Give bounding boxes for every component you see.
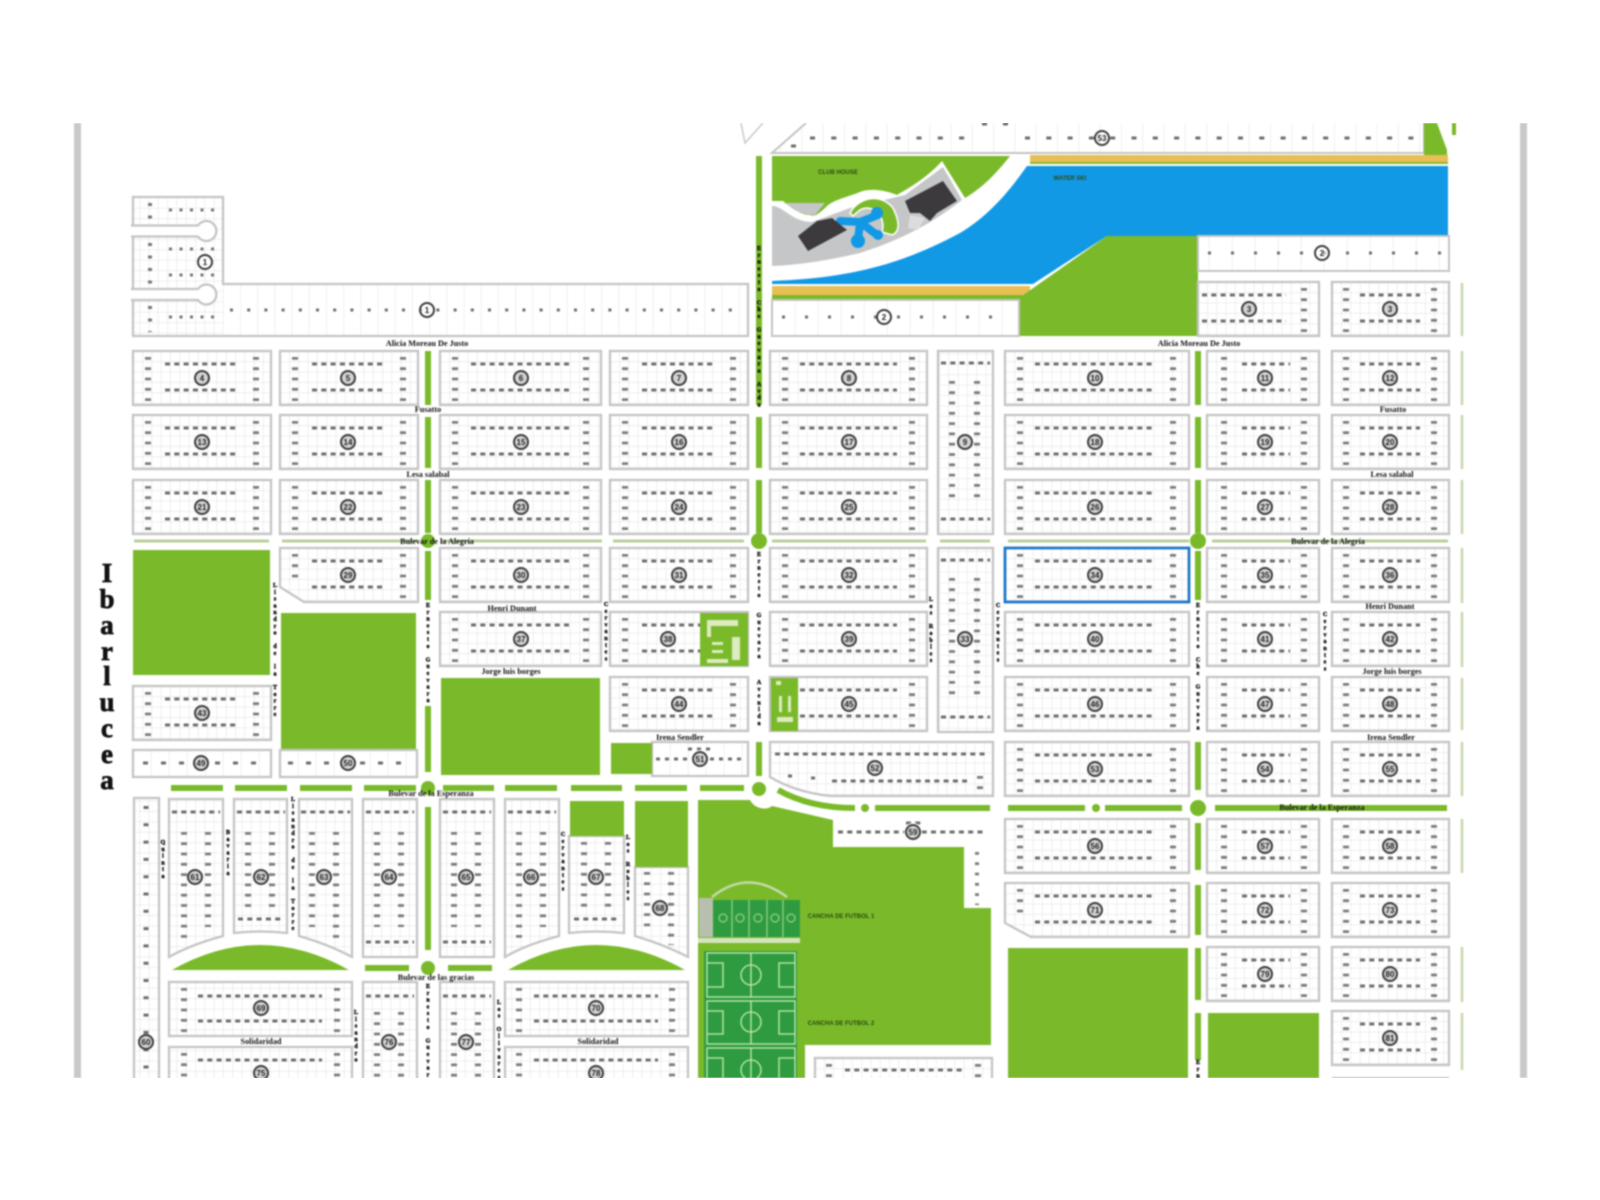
stadium with small pitches bbox=[698, 882, 800, 943]
row 4 blocks: 36 bbox=[1386, 571, 1395, 580]
bottom row blocks: 70 bbox=[592, 1004, 601, 1013]
row 3 blocks: 24 bbox=[675, 503, 684, 512]
vertical street names: Cervantes bbox=[995, 603, 1001, 664]
town name: Ibarlucea: b bbox=[99, 584, 115, 614]
row 2 blocks: 13 bbox=[198, 438, 207, 447]
block 3 left: 3 bbox=[1247, 305, 1252, 314]
row 3 blocks: 21 bbox=[198, 503, 207, 512]
Bulevar de las gracias band bbox=[365, 965, 492, 971]
bottom row blocks bbox=[169, 982, 688, 1101]
vertical street names: Ernesto Che Guevara bbox=[1195, 603, 1201, 732]
row 2 blocks: 14 bbox=[344, 438, 353, 447]
bottom row blocks: 78 bbox=[592, 1069, 601, 1078]
south columns of lots: 61 bbox=[191, 873, 200, 882]
row 8 to 11, east blocks: 72 bbox=[1261, 906, 1270, 915]
block 2 east of park: 2 bbox=[1320, 249, 1325, 258]
vertical street names: Los Olivares bbox=[496, 1000, 502, 1082]
vertical street names: Quinta bbox=[160, 840, 166, 881]
row 8 to 11, east blocks: 73 bbox=[1386, 906, 1395, 915]
row 2 blocks: 17 bbox=[845, 438, 854, 447]
row 3 blocks: 26 bbox=[1091, 503, 1100, 512]
Bulevar de la Esperanza west band bbox=[171, 785, 744, 791]
row 7 blocks: 52 bbox=[871, 764, 880, 773]
street labels: Henri Dunant bbox=[488, 604, 537, 613]
south columns of lots: 66 bbox=[527, 873, 536, 882]
south columns of lots: 68 bbox=[656, 904, 665, 913]
highlighted block 34: 34 bbox=[1091, 571, 1100, 580]
row 8 to 11, east blocks: 81 bbox=[1386, 1034, 1395, 1043]
row 4 blocks: 30 bbox=[517, 571, 526, 580]
row 8 to 11, east blocks: 79 bbox=[1261, 970, 1270, 979]
row 3 blocks: 28 bbox=[1386, 503, 1395, 512]
row 1 blocks: 10 bbox=[1091, 374, 1100, 383]
row 6 blocks: 43 bbox=[198, 709, 207, 718]
town name: Ibarlucea: u bbox=[99, 687, 115, 717]
bottom row blocks: 76 bbox=[385, 1038, 394, 1047]
top strip of lots, block 53: 53 bbox=[1098, 134, 1107, 143]
row 3 blocks: 22 bbox=[344, 503, 353, 512]
lake bbox=[772, 166, 1448, 284]
vertical street names bbox=[160, 246, 1328, 1108]
green park beside lake bbox=[1019, 236, 1198, 336]
Bulevar de la Esperanza east band bbox=[778, 790, 1447, 812]
row 5 blocks: 40 bbox=[1091, 635, 1100, 644]
row 7 blocks: 50 bbox=[344, 759, 353, 768]
block 3 left bbox=[1198, 282, 1319, 336]
vertical street names: Cervantes bbox=[603, 602, 609, 663]
street labels: Fusatto bbox=[415, 405, 441, 414]
street labels: Bulevar de la Esperanza bbox=[1279, 803, 1365, 812]
row 2 blocks: 20 bbox=[1386, 438, 1395, 447]
football pitches bbox=[704, 951, 797, 1092]
row 1 blocks: 4 bbox=[200, 374, 205, 383]
left margin bar bbox=[74, 123, 81, 1078]
row 3 blocks: 27 bbox=[1261, 503, 1270, 512]
pitch labels bbox=[808, 914, 875, 1027]
row 6 blocks: 47 bbox=[1261, 700, 1270, 709]
row 1 blocks: 6 bbox=[519, 374, 524, 383]
row 4 blocks: 31 bbox=[675, 571, 684, 580]
crescent park east bbox=[508, 945, 685, 970]
row 3 blocks: 23 bbox=[517, 503, 526, 512]
small park in row 7 bbox=[611, 743, 652, 774]
row 1 blocks bbox=[133, 351, 1449, 405]
row 8 to 11, east blocks bbox=[1005, 819, 1449, 1065]
row 2 blocks: 19 bbox=[1261, 438, 1270, 447]
vertical street names: Ernesto Guevara bbox=[425, 984, 431, 1086]
vertical street names: Los Robles bbox=[928, 597, 934, 665]
row 7 blocks bbox=[133, 742, 1449, 796]
vertical street names: Cervantes bbox=[1322, 612, 1328, 673]
row 4 blocks: 29 bbox=[344, 571, 353, 580]
club house grounds: CLUB HOUSE bbox=[818, 170, 858, 176]
row 5 blocks: 39 bbox=[845, 635, 854, 644]
street labels: Bulevar de la Alegría bbox=[1291, 537, 1365, 546]
south columns of lots: 63 bbox=[320, 873, 329, 882]
south columns of lots: 67 bbox=[592, 873, 601, 882]
strip block 59 bbox=[837, 820, 984, 906]
vertical street names: Bavaria bbox=[225, 830, 231, 878]
tall block 33: 33 bbox=[961, 635, 970, 644]
row 6 blocks: 46 bbox=[1091, 700, 1100, 709]
vertical street names: Ernesto Che Guevara Avda bbox=[756, 246, 762, 409]
town name: Ibarlucea: l bbox=[103, 661, 111, 691]
street labels: Lesa salabal bbox=[406, 470, 450, 479]
town name: Ibarlucea: a bbox=[100, 610, 114, 640]
bottom row blocks: 75 bbox=[257, 1069, 266, 1078]
row 4 blocks bbox=[280, 548, 1449, 602]
park block A bbox=[133, 550, 270, 675]
row 6 blocks: 44 bbox=[675, 700, 684, 709]
club house grounds bbox=[772, 156, 1087, 266]
vertical street names: Cervantes bbox=[560, 832, 566, 893]
east parks bbox=[1008, 948, 1449, 1080]
row 1 blocks: 11 bbox=[1261, 374, 1270, 383]
street labels: Alicia Moreau De Justo bbox=[386, 339, 468, 348]
block 3 right bbox=[1332, 282, 1449, 336]
south columns of lots: 62 bbox=[257, 873, 266, 882]
row 4 blocks: 32 bbox=[845, 571, 854, 580]
town name: Ibarlucea: r bbox=[101, 636, 113, 666]
south columns of lots: 65 bbox=[462, 873, 471, 882]
pitch labels: CANCHA DE FUTBOL 2 bbox=[808, 1021, 875, 1027]
bottom row blocks: 69 bbox=[257, 1004, 266, 1013]
town name: Ibarlucea: c bbox=[101, 713, 113, 743]
row 8 to 11, east blocks: 57 bbox=[1261, 842, 1270, 851]
street labels: Solidaridad bbox=[578, 1037, 619, 1046]
school plot in block 45 bbox=[771, 678, 798, 731]
street labels bbox=[241, 339, 1422, 1046]
row 7 blocks: 51 bbox=[696, 755, 705, 764]
row 1 blocks: 5 bbox=[346, 374, 351, 383]
tall block 9 bbox=[938, 351, 993, 534]
south-west long column: 60 bbox=[142, 1038, 151, 1047]
south-west long column bbox=[134, 798, 159, 1088]
vertical street names: Los Robles bbox=[625, 835, 631, 903]
sand shores bbox=[772, 155, 1448, 300]
town name: Ibarlucea: I bbox=[102, 558, 112, 588]
block 2 west of park bbox=[772, 300, 1019, 336]
row 8 to 11, east blocks: 58 bbox=[1386, 842, 1395, 851]
pale east edge strips bbox=[1461, 283, 1463, 1070]
row 8 to 11, east blocks: 56 bbox=[1091, 842, 1100, 851]
row 2 blocks: 18 bbox=[1091, 438, 1100, 447]
row 8 to 11, east blocks: 71 bbox=[1091, 906, 1100, 915]
street labels: Irena Sendler bbox=[656, 733, 704, 742]
green median at x 759 bbox=[748, 156, 770, 800]
row 4 blocks: 35 bbox=[1261, 571, 1270, 580]
club house grounds: WATER SKI bbox=[1054, 176, 1087, 182]
tall block 9: 9 bbox=[963, 438, 968, 447]
bottom row blocks: 77 bbox=[462, 1038, 471, 1047]
street labels: Solidaridad bbox=[241, 1037, 282, 1046]
block 2 east of park bbox=[1198, 236, 1449, 271]
row 5 blocks: 37 bbox=[517, 635, 526, 644]
vertical street names: Lisandro bbox=[353, 1010, 359, 1064]
sports park bbox=[698, 800, 991, 1078]
row 8 to 11, east blocks: 80 bbox=[1386, 970, 1395, 979]
street labels: Bulevar de las gracias bbox=[398, 973, 474, 982]
street labels: Bulevar de la Alegría bbox=[400, 537, 474, 546]
block 1: L-shaped lots with cul-de-sacs: 1 bbox=[203, 258, 208, 267]
street labels: Bulevar de la Esperanza bbox=[388, 789, 474, 798]
block 1: L-shaped lots with cul-de-sacs bbox=[131, 197, 748, 336]
south columns of lots: 64 bbox=[385, 873, 394, 882]
south parks bbox=[570, 801, 688, 867]
street labels: Irena Sendler bbox=[1367, 733, 1415, 742]
row 7 blocks: 53 bbox=[1091, 765, 1100, 774]
pitch labels: CANCHA DE FUTBOL 1 bbox=[808, 914, 875, 920]
street labels: Alicia Moreau De Justo bbox=[1158, 339, 1240, 348]
park column B bbox=[281, 613, 416, 751]
row 7 blocks: 54 bbox=[1261, 765, 1270, 774]
green median at x 429 bbox=[421, 351, 435, 975]
row 1 blocks: 7 bbox=[677, 374, 682, 383]
south columns of lots bbox=[169, 799, 688, 957]
green median at x 1198 bbox=[1190, 351, 1206, 1060]
row 2 blocks: 16 bbox=[675, 438, 684, 447]
town name: Ibarlucea: e bbox=[101, 739, 113, 769]
row 2 blocks bbox=[133, 415, 1449, 469]
row 7 blocks: 55 bbox=[1386, 765, 1395, 774]
row 5 blocks: 38 bbox=[664, 635, 673, 644]
vertical street names: Ernesto Guevara bbox=[425, 603, 431, 705]
street labels: Fusatto bbox=[1380, 405, 1406, 414]
row 6 blocks: 48 bbox=[1386, 700, 1395, 709]
map sheet bbox=[74, 123, 1527, 1108]
school plot in block 38 bbox=[700, 613, 748, 666]
vertical street names: Lisandro de la Torre bbox=[290, 797, 296, 933]
vertical street names: Lisandro de la Torre bbox=[272, 583, 278, 719]
block 1: L-shaped lots with cul-de-sacs: 1 bbox=[425, 306, 430, 315]
row 1 blocks: 8 bbox=[847, 374, 852, 383]
street labels: Henri Dunant bbox=[1366, 602, 1415, 611]
row 3 blocks: 25 bbox=[845, 503, 854, 512]
Bulevar de la Alegria band bbox=[134, 540, 1448, 542]
row 1 blocks: 12 bbox=[1386, 374, 1395, 383]
vertical street names: Guevara bbox=[756, 613, 762, 661]
row 5 blocks: 42 bbox=[1386, 635, 1395, 644]
block 3 right: 3 bbox=[1388, 305, 1393, 314]
row 5 blocks: 41 bbox=[1261, 635, 1270, 644]
right margin bar bbox=[1520, 123, 1527, 1078]
row 3 blocks bbox=[133, 480, 1449, 534]
vertical street names: Avenida bbox=[756, 680, 762, 728]
top strip of lots, block 53 bbox=[740, 123, 1457, 156]
strip block 59: 59 bbox=[909, 828, 918, 837]
tall block 33 bbox=[938, 548, 993, 732]
row 6 blocks bbox=[133, 677, 1449, 740]
street labels: Lesa salabal bbox=[1370, 470, 1414, 479]
row 6 blocks: 45 bbox=[845, 700, 854, 709]
block 2 west of park: 2 bbox=[882, 313, 887, 322]
row 7 blocks: 49 bbox=[197, 759, 206, 768]
park column C bbox=[441, 678, 600, 775]
block 74 at bottom bbox=[813, 1056, 994, 1078]
highlighted block 34 bbox=[1005, 548, 1189, 602]
vertical street names: Ernesto bbox=[1195, 1060, 1201, 1108]
town name: Ibarlucea: a bbox=[100, 765, 114, 795]
row 2 blocks: 15 bbox=[517, 438, 526, 447]
row 5 blocks bbox=[440, 612, 1449, 666]
street labels: Jorge luis borges bbox=[1362, 667, 1422, 676]
street labels: Jorge luis borges bbox=[481, 667, 541, 676]
crescent park west bbox=[172, 945, 349, 970]
vertical street names: Ernesto bbox=[756, 552, 762, 600]
